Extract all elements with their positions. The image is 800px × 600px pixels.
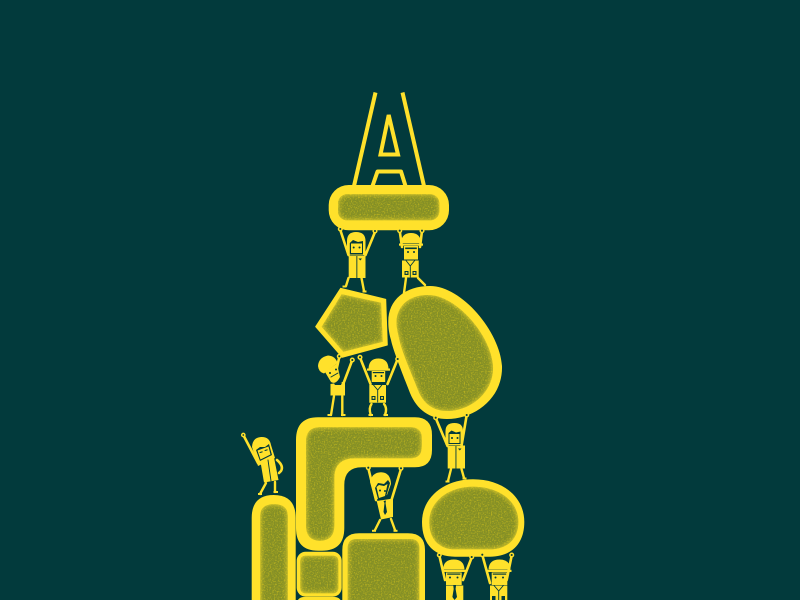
block: L shape: [296, 417, 432, 551]
block: pentagon: [316, 288, 387, 357]
figure: hard hat worker lifting dome: [480, 553, 514, 600]
figure: waving woman: [242, 433, 282, 495]
figure: woman lifting pill: [338, 227, 377, 292]
block: large square: [342, 533, 425, 600]
block: large bean shape: [388, 286, 502, 419]
figure: woman lifting dome: [434, 413, 469, 482]
block: horizontal pill: [329, 185, 449, 230]
figure: bearded man with hat lifting pentagon: [318, 354, 354, 416]
figure: hard hat worker lifting pill: [398, 229, 425, 293]
block: dome: [422, 479, 524, 557]
letter A: [354, 92, 424, 186]
block: vertical pill: [252, 495, 296, 600]
figure: hard hat worker lifting pentagon: [358, 356, 400, 416]
block: rounded shape cut off at the bottom: [297, 597, 342, 600]
figure: man in tie: [366, 466, 403, 532]
figure: hard hat worker with tie lifting dome: [438, 553, 474, 600]
block: small square: [297, 552, 342, 597]
